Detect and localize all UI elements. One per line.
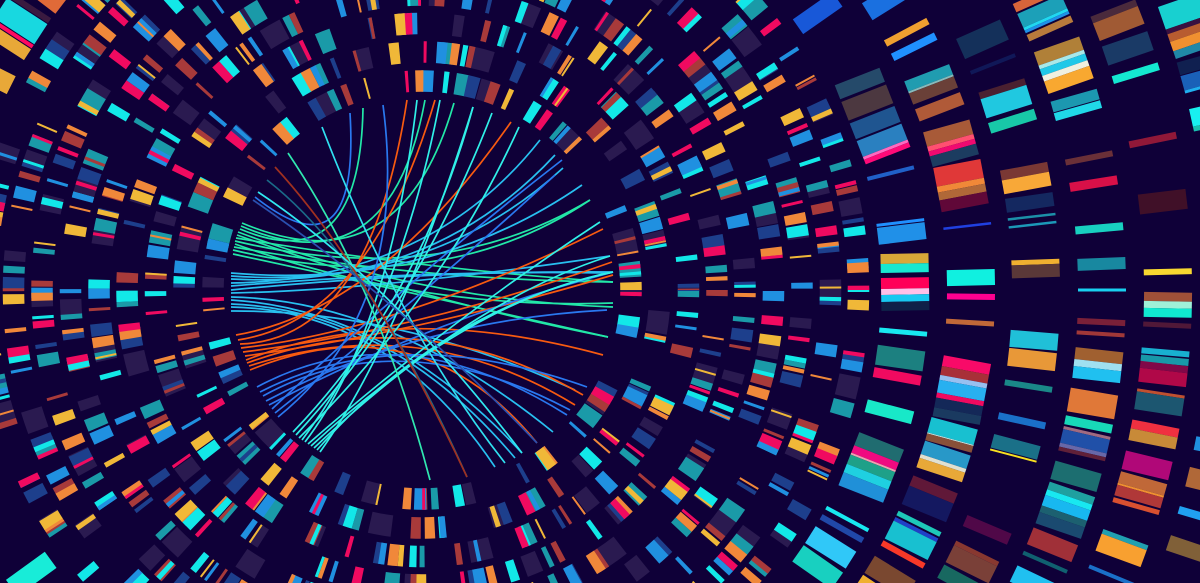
inner ring 2 (184, 52, 660, 528)
outer ring 14 blocks (1088, 0, 1192, 583)
outer ring 12 blocks (937, 19, 1060, 583)
chord lines: cyan bundle (293, 100, 613, 452)
chord lines: blue bundle (255, 105, 613, 417)
outer ring 15 blocks (1158, 0, 1200, 566)
inner ring 6 (70, 0, 774, 583)
inner ring 9 (0, 0, 858, 583)
chord lines: cyan-blue bundle (231, 140, 612, 467)
inner ring 1 (213, 81, 631, 499)
inner ring 8 (14, 0, 830, 583)
inner ring 5 (99, 0, 745, 583)
inner ring 3 (156, 24, 688, 556)
outer ring 11 blocks (856, 0, 995, 583)
chord lines: green bundle (233, 100, 613, 337)
chord lines: orange bundle (236, 100, 613, 443)
chord lines: long arcs (253, 127, 537, 480)
outer ring 13 blocks (1010, 0, 1126, 583)
inner ring 4 (127, 0, 717, 583)
outer ring 10 blocks (0, 0, 929, 583)
inner ring 7 (42, 0, 802, 583)
